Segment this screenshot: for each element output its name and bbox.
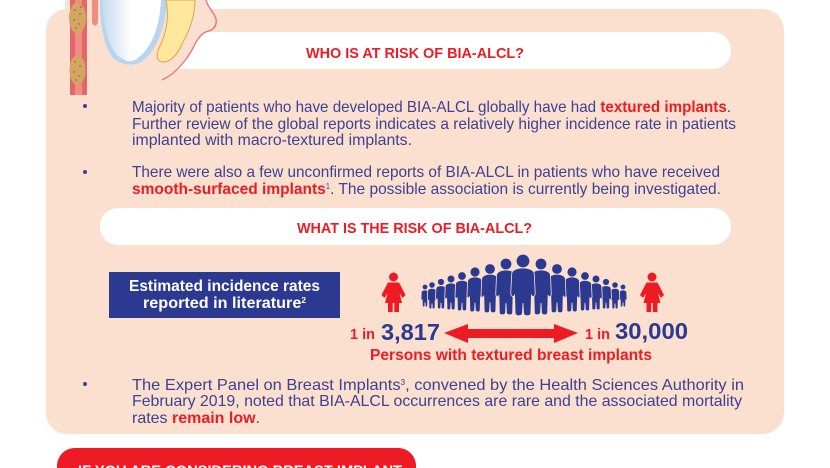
caption: persons with textured breast implants: Persons with textured breast implants [370, 347, 652, 364]
label: 1 in 3,817: 3,817 [381, 319, 440, 345]
pill: what is the risk [100, 208, 731, 245]
label: 1 in 30,000 [585, 318, 688, 344]
bullet list: who is at risk: 1 [326, 182, 331, 191]
text block: expert panel: February 2019, noted that BIA-ALCL occurrences are rare and the associated mortality [132, 393, 742, 410]
pill: who is at risk [100, 32, 731, 69]
label: 1 in 30,000: 30,000 [615, 318, 688, 344]
text block: expert panel: 3 [401, 378, 406, 387]
bullet list: who is at risk: implanted with macro-textured implants. [132, 132, 412, 149]
banner: if you are considering [57, 448, 416, 468]
bullet list: who is at risk: . The possible association is currently being investigated. [330, 181, 721, 198]
bullet list: who is at risk: There were also a few unconfirmed reports of BIA-ALCL in patients who have received [132, 164, 720, 181]
arrow: range between rates [444, 324, 578, 343]
label: 1 in 30,000: 1 in [585, 326, 610, 343]
text block: expert panel: , convened by the Health Sciences Authority in [405, 377, 744, 394]
illustration: breast implant cross-section [65, 0, 216, 95]
label: 1 in 3,817: 1 in [350, 326, 375, 343]
icon: red woman left [382, 272, 406, 312]
bullet list: who is at risk: Majority of patients who have developed BIA-ALCL globally have had textured implants. [132, 99, 731, 116]
icon: crowd of people [421, 254, 627, 316]
box: estimated incidence rates [109, 272, 340, 318]
icon: red woman right [640, 272, 664, 312]
bullet list: who is at risk [83, 99, 736, 198]
text block: expert panel [83, 377, 744, 427]
text block: expert panel: rates remain low. [132, 410, 260, 427]
pill: what is the risk: WHAT IS THE RISK OF BIA-ALCL? [297, 220, 532, 237]
label: 1 in 3,817 [350, 319, 440, 345]
box: estimated incidence rates: Estimated incidence rates [129, 278, 320, 295]
bullet list: who is at risk: Further review of the global reports indicates a relatively higher incidence rate in patients [132, 116, 736, 133]
text block: expert panel: The Expert Panel on Breast Implants [132, 377, 393, 394]
box: estimated incidence rates: 2 [301, 296, 307, 305]
box: estimated incidence rates: reported in literature [143, 295, 295, 312]
pill: who is at risk: WHO IS AT RISK OF BIA-ALCL? [306, 45, 524, 62]
bullet list: who is at risk: smooth-surfaced implants [132, 181, 326, 198]
